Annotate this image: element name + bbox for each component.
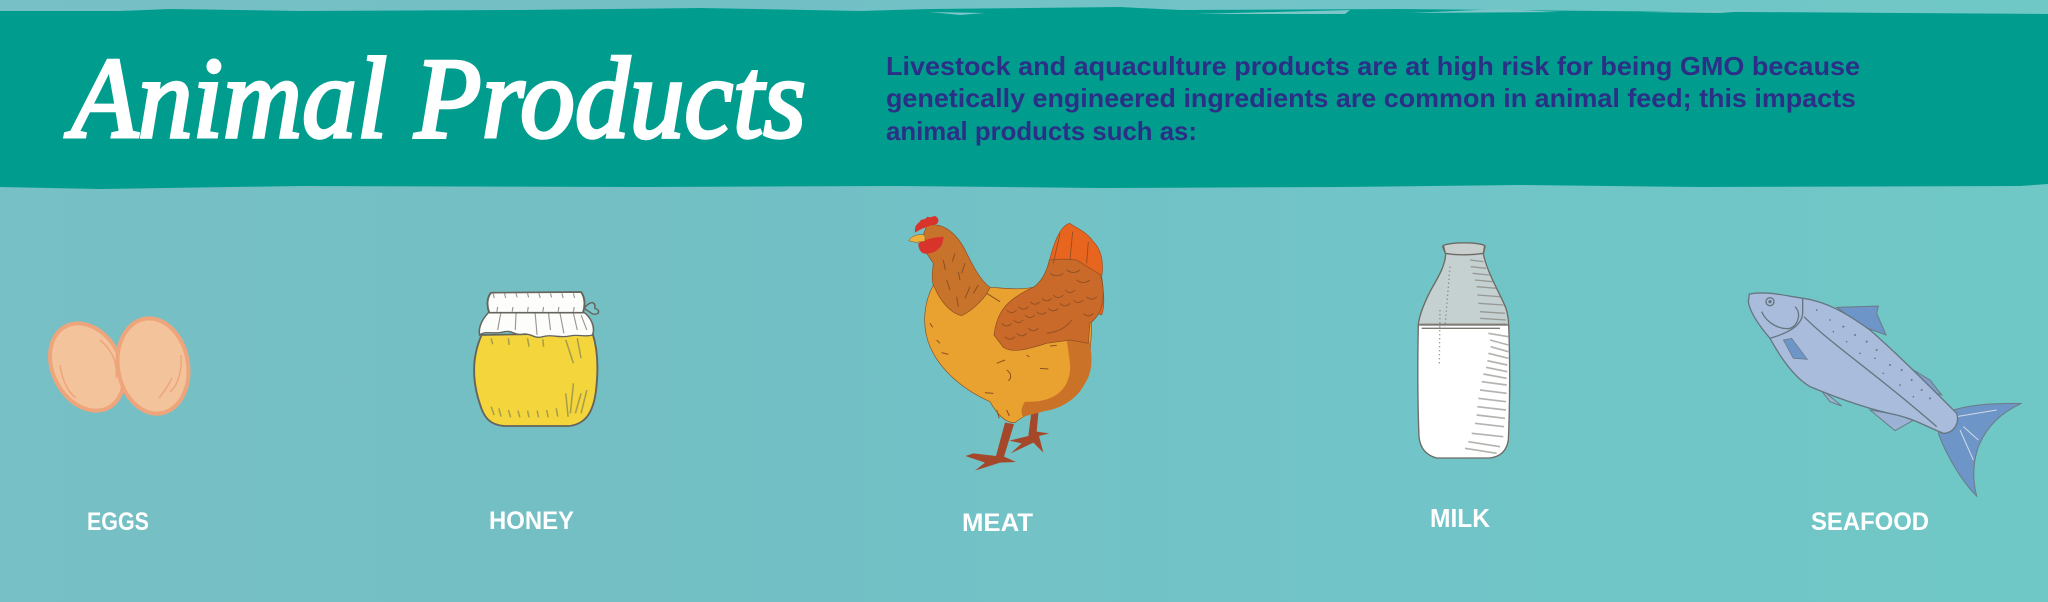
- label: honey: HONEY: [489, 507, 574, 535]
- icon: honey jar: [474, 292, 599, 426]
- description text: [886, 51, 1860, 146]
- icon: fish: [1748, 293, 2022, 496]
- bottle glass: [1418, 243, 1509, 327]
- head and gill: [1762, 298, 1937, 427]
- label: meat: MEAT: [962, 509, 1033, 537]
- milk level: [1420, 324, 1507, 328]
- tail: [1048, 223, 1104, 315]
- pectoral fin: [1783, 338, 1807, 359]
- rear shading: [1022, 339, 1091, 417]
- icon: chicken: [909, 216, 1104, 471]
- belly fins: [1818, 387, 1917, 431]
- label: eggs: EGGS: [87, 508, 149, 536]
- description text: genetically engineered ingredients are common in animal feed; this impacts: [886, 83, 1856, 113]
- title: Animal Products: [64, 35, 806, 163]
- legs: [965, 410, 1049, 471]
- neck: [920, 225, 990, 316]
- description text: animal products such as:: [886, 116, 1197, 146]
- body: [925, 285, 1091, 423]
- body: [1748, 293, 1958, 433]
- icon: eggs: [35, 310, 196, 424]
- description text: Livestock and aquaculture products are at high risk for being GMO because: [886, 51, 1860, 81]
- wing feathers: [1002, 232, 1097, 339]
- dorsal fin: [1837, 306, 1886, 335]
- beak: [909, 235, 925, 242]
- shading: [1439, 260, 1508, 453]
- label: milk: MILK: [1430, 503, 1490, 533]
- tail fin: [1938, 403, 2022, 496]
- milk: [1418, 325, 1510, 458]
- header band: [0, 7, 2048, 189]
- comb and wattle: [915, 216, 938, 233]
- wing: [994, 259, 1103, 350]
- body marks: [930, 293, 1057, 418]
- scale dots: [1816, 309, 1931, 399]
- rear fin: [1913, 370, 1942, 395]
- label: seafood: SEAFOOD: [1811, 508, 1929, 536]
- icon: milk bottle: [1418, 243, 1510, 458]
- neck feathers: [943, 253, 978, 307]
